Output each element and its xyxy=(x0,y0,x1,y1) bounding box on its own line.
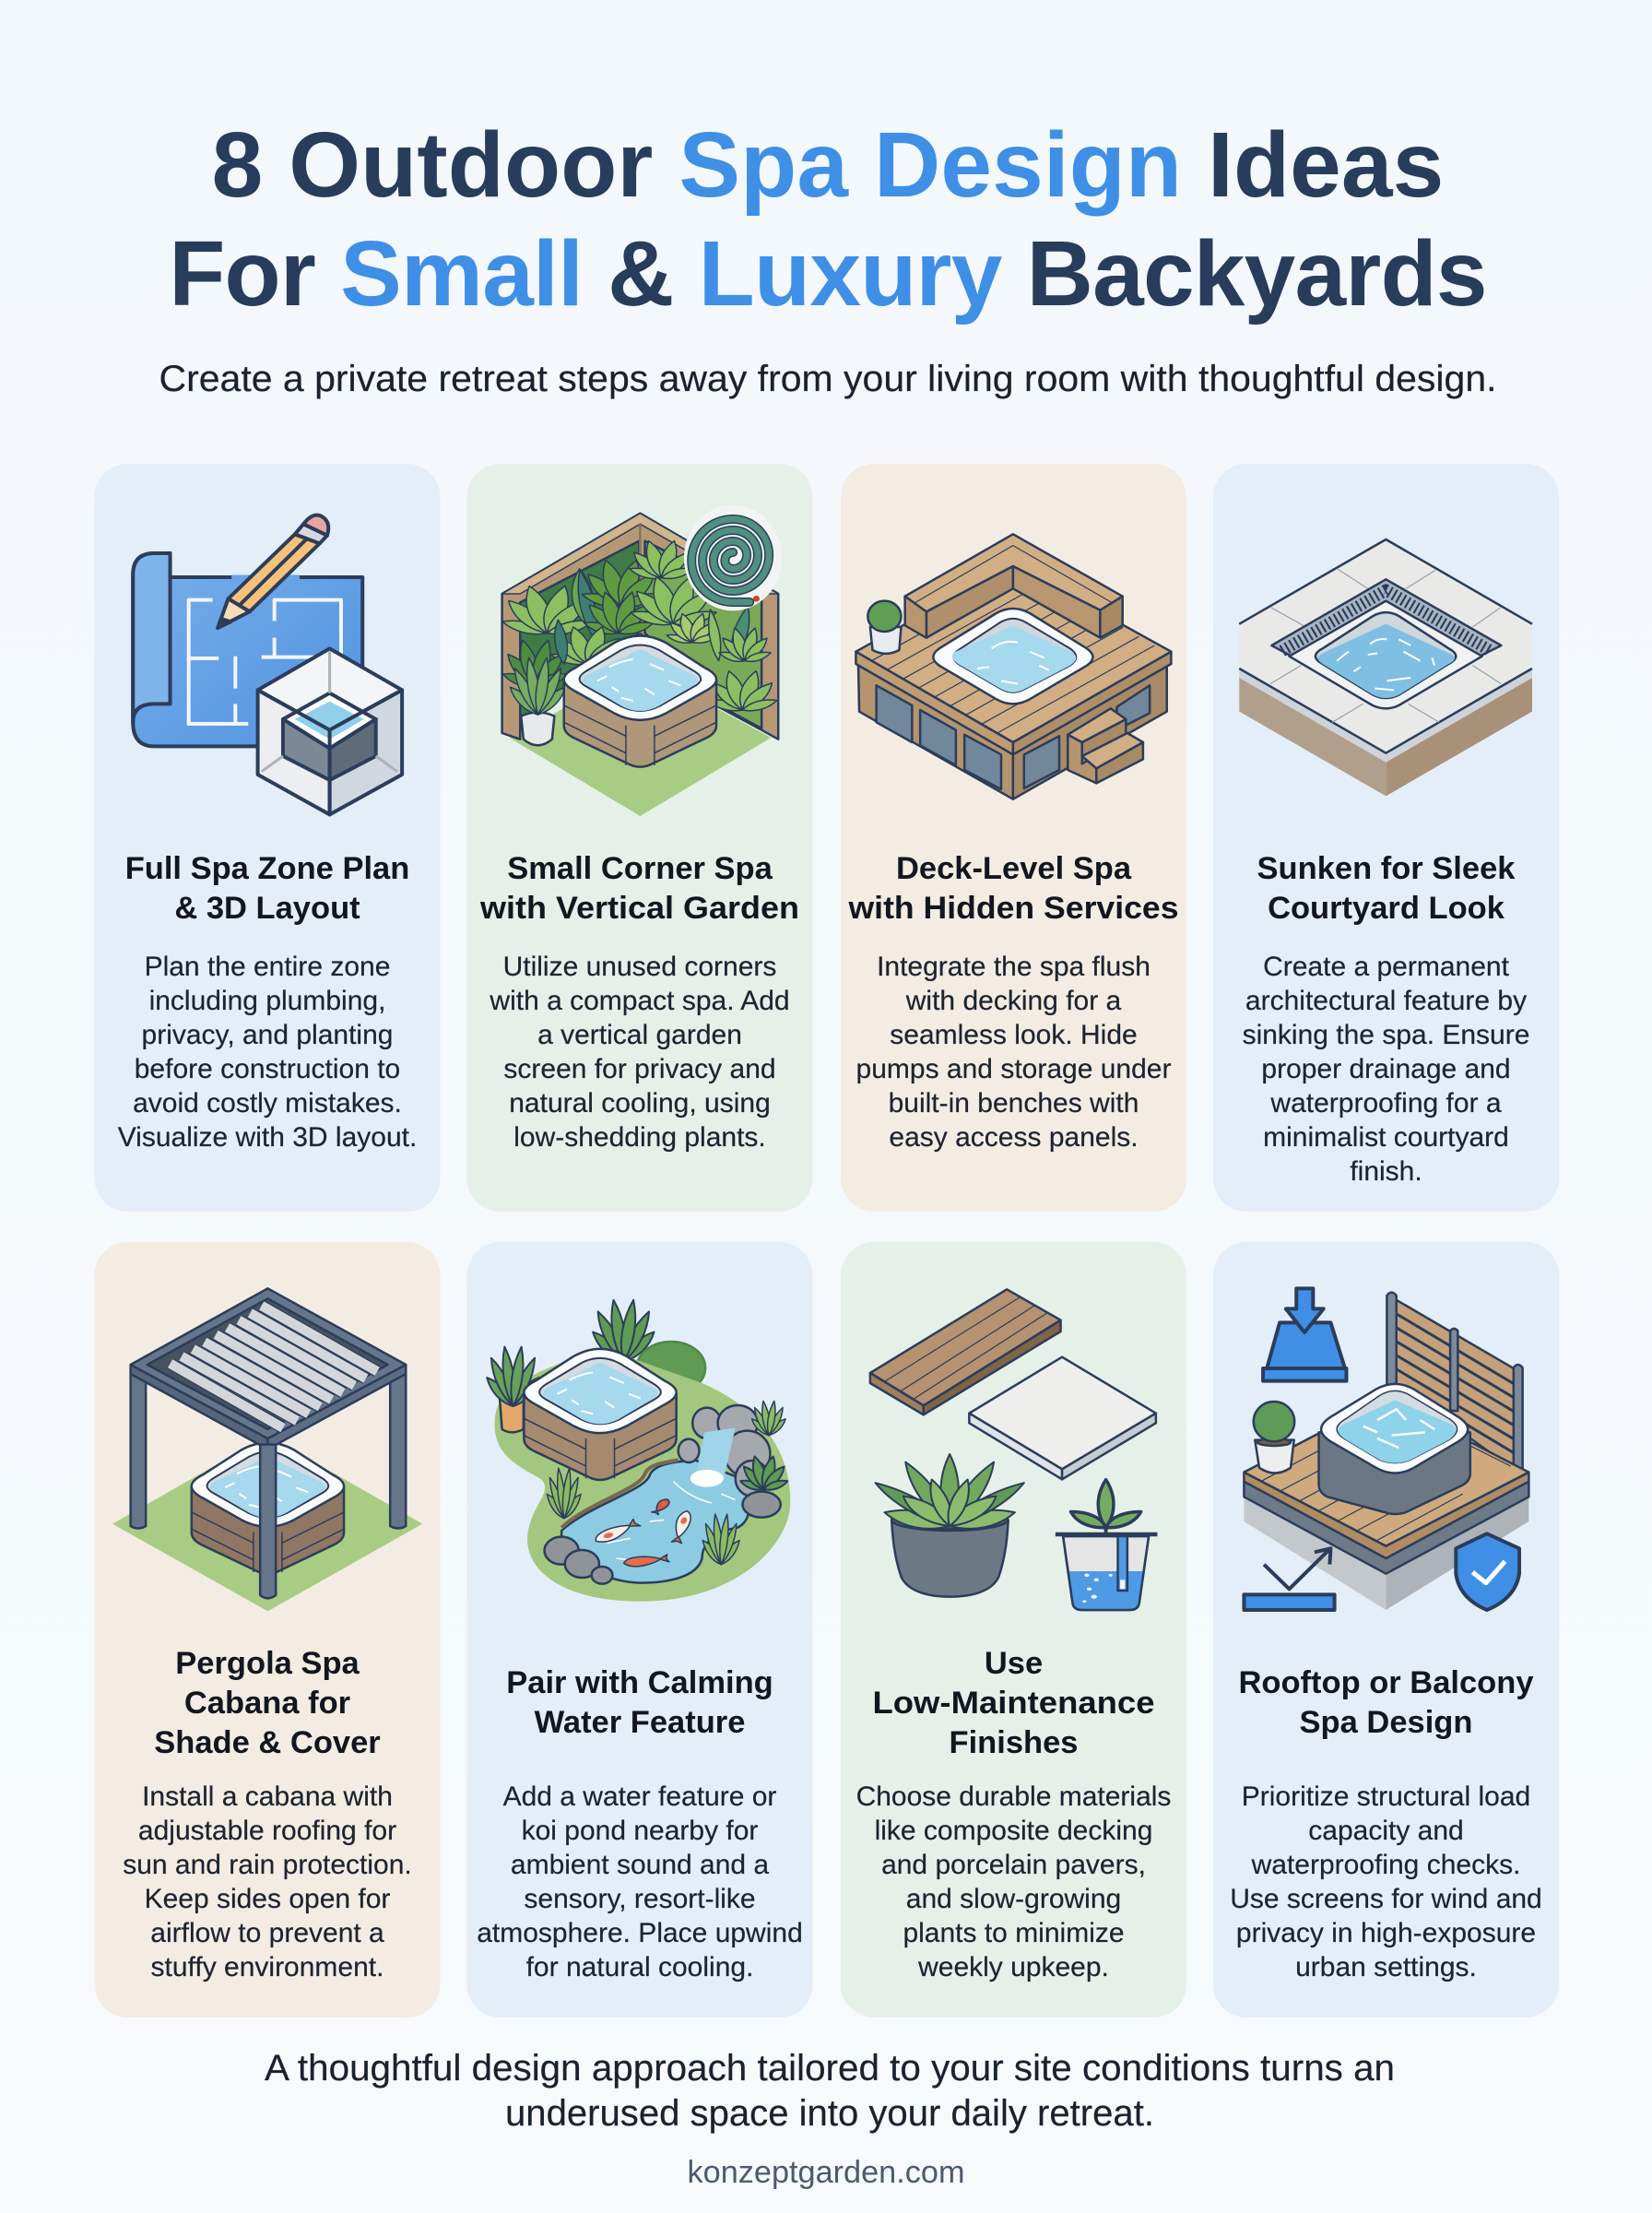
card text xyxy=(1243,952,1529,1187)
card text: screen for privacy and xyxy=(503,1054,776,1084)
card text: privacy in high-exposure xyxy=(1236,1918,1536,1948)
card text: minimalist courtyard xyxy=(1263,1122,1509,1153)
title: 8 Outdoor Spa Design Ideas xyxy=(212,113,1444,217)
card title: with Hidden Services xyxy=(847,891,1178,926)
card text: capacity and xyxy=(1308,1816,1464,1846)
card text: proper drainage and xyxy=(1261,1054,1511,1084)
card text: waterproofing for a xyxy=(1269,1088,1502,1118)
title: For Small & Luxury Backyards xyxy=(169,222,1487,325)
panel: low-maintenance finishes xyxy=(841,1242,1186,2018)
card text: architectural feature by xyxy=(1245,986,1527,1016)
card title xyxy=(479,851,799,926)
card text: easy access panels. xyxy=(889,1122,1139,1153)
website: konzeptgarden.com xyxy=(688,2155,964,2190)
card title: Deck-Level Spa xyxy=(896,851,1132,886)
card text: seamless look. Hide xyxy=(890,1020,1138,1050)
card title: with Vertical Garden xyxy=(479,891,799,926)
card title: Pergola Spa xyxy=(175,1646,360,1681)
card text: Use screens for wind and xyxy=(1230,1884,1542,1914)
card text xyxy=(123,1781,412,1982)
icon: spa with koi pond and waterfall xyxy=(483,1299,790,1602)
card text: Choose durable materials xyxy=(856,1781,1171,1812)
panel: rooftop or balcony spa xyxy=(1213,1242,1559,2018)
card text: Utilize unused corners xyxy=(503,952,776,982)
card text: ambient sound and a xyxy=(511,1850,769,1880)
card text xyxy=(856,1781,1171,1982)
card title: Spa Design xyxy=(1300,1705,1472,1740)
card text: plants to minimize xyxy=(903,1918,1125,1948)
card text: urban settings. xyxy=(1295,1952,1477,1982)
card title: Full Spa Zone Plan xyxy=(125,851,409,886)
card text: waterproofing checks. xyxy=(1251,1850,1520,1880)
card text: atmosphere. Place upwind xyxy=(477,1918,803,1948)
closing statement: underused space into your daily retreat. xyxy=(505,2093,1154,2134)
card text: for natural cooling. xyxy=(526,1952,753,1982)
card title: Use xyxy=(985,1646,1043,1681)
card text: Keep sides open for xyxy=(145,1884,390,1914)
card text: before construction to xyxy=(135,1054,400,1084)
closing statement: A thoughtful design approach tailored to your site conditions turns an xyxy=(265,2048,1395,2089)
card text xyxy=(1230,1781,1542,1982)
card text: with decking for a xyxy=(905,986,1122,1016)
icon: pergola over spa xyxy=(112,1288,422,1611)
card text: Install a cabana with xyxy=(142,1781,393,1812)
card title: Pair with Calming xyxy=(506,1665,773,1700)
card title xyxy=(872,1646,1154,1760)
card text xyxy=(489,952,790,1153)
card text: weekly upkeep. xyxy=(917,1952,1109,1982)
card text: including plumbing, xyxy=(149,986,385,1016)
panel: calming water feature xyxy=(466,1242,813,2018)
card text: low-shedding plants. xyxy=(513,1122,766,1153)
card title: Shade & Cover xyxy=(154,1725,381,1760)
card text: with a compact spa. Add xyxy=(489,986,790,1016)
card title: Cabana for xyxy=(184,1686,350,1721)
card text: stuffy environment. xyxy=(151,1952,384,1982)
card title xyxy=(1238,1665,1534,1740)
card text: sensory, resort-like xyxy=(524,1884,756,1914)
card text: privacy, and planting xyxy=(142,1020,393,1050)
card title xyxy=(847,851,1178,926)
card text: airflow to prevent a xyxy=(150,1918,384,1948)
card title: Water Feature xyxy=(535,1705,745,1740)
card text: Visualize with 3D layout. xyxy=(118,1122,417,1153)
panel: deck-level spa xyxy=(841,464,1186,1212)
card title xyxy=(506,1665,773,1740)
card text: avoid costly mistakes. xyxy=(133,1088,402,1118)
panel: full spa zone plan xyxy=(94,464,441,1212)
card title: & 3D Layout xyxy=(174,891,360,926)
card title: Low-Maintenance xyxy=(872,1686,1154,1721)
closing statement xyxy=(265,2048,1395,2134)
card text: finish. xyxy=(1350,1156,1422,1187)
icon: sunken courtyard spa xyxy=(1239,539,1532,796)
card text: like composite decking xyxy=(875,1816,1152,1846)
card text: koi pond nearby for xyxy=(522,1816,758,1846)
card title: Finishes xyxy=(950,1725,1078,1760)
card text: Integrate the spa flush xyxy=(877,952,1150,982)
card title: Small Corner Spa xyxy=(507,851,773,886)
panel: small corner spa xyxy=(466,464,813,1212)
card text: adjustable roofing for xyxy=(138,1816,396,1846)
panel: sunken spa xyxy=(1213,464,1559,1212)
card text xyxy=(856,952,1171,1153)
card text: built-in benches with xyxy=(889,1088,1139,1118)
card title xyxy=(125,851,409,926)
icon: corner spa with vertical garden xyxy=(500,505,782,816)
card title: Courtyard Look xyxy=(1268,891,1505,926)
card title xyxy=(1257,851,1516,926)
card title: Rooftop or Balcony xyxy=(1238,1665,1534,1700)
card text: a vertical garden xyxy=(537,1020,742,1050)
card text xyxy=(118,952,417,1153)
card title: Sunken for Sleek xyxy=(1257,851,1516,886)
icon: deck-level spa with hidden services xyxy=(856,534,1171,799)
card text: natural cooling, using xyxy=(509,1088,771,1118)
card title xyxy=(154,1646,381,1760)
subtitle: Create a private retreat steps away from your living room with thoughtful design. xyxy=(159,359,1497,399)
panel: pergola spa cabana xyxy=(94,1242,441,2018)
card text: and porcelain pavers, xyxy=(881,1850,1146,1880)
card text: Plan the entire zone xyxy=(145,952,390,982)
icon: blueprint, pencil and 3D cube xyxy=(133,515,402,814)
card text: sinking the spa. Ensure xyxy=(1243,1020,1529,1050)
card text: and slow-growing xyxy=(906,1884,1121,1914)
card text: Add a water feature or xyxy=(503,1781,776,1812)
card text: Create a permanent xyxy=(1263,952,1510,982)
card text: Prioritize structural load xyxy=(1242,1781,1530,1812)
icon: rooftop spa with load, level and shield symbols xyxy=(1244,1288,1528,1610)
card text: pumps and storage under xyxy=(856,1054,1171,1084)
icon: decking, paver and planters xyxy=(869,1289,1157,1610)
title xyxy=(169,113,1487,325)
card text xyxy=(477,1781,803,1982)
card text: sun and rain protection. xyxy=(123,1850,412,1880)
